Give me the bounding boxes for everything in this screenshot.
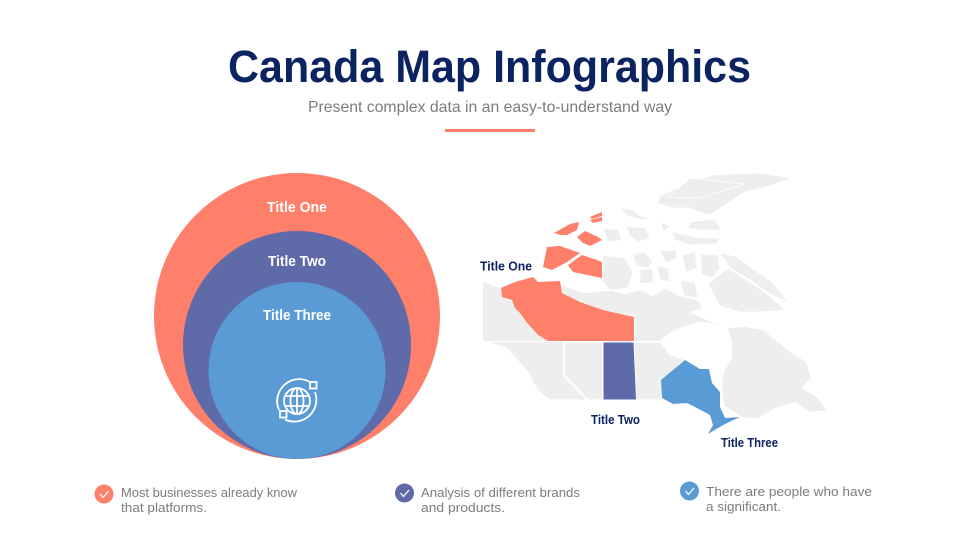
subtitle: Present complex data in an easy-to-understand way — [308, 99, 672, 116]
bullet text: There are people who have — [706, 484, 872, 499]
quebec and atlantic provinces — [722, 327, 826, 418]
region: title one mainland — [501, 277, 634, 341]
bullet text: that platforms. — [121, 500, 207, 515]
bullet: analysis — [395, 484, 581, 515]
alberta — [565, 343, 602, 400]
manitoba — [634, 343, 684, 400]
region: title three — [661, 360, 740, 434]
bullet text: Most businesses already know — [121, 485, 298, 500]
icon: indigo check — [395, 484, 414, 502]
icon: globe with arrows — [277, 379, 316, 422]
circle: title three — [208, 282, 386, 459]
bullet text: Analysis of different brands — [421, 485, 581, 500]
label: title one: Title One — [267, 200, 327, 216]
arctic islands — [603, 173, 792, 312]
nested circle chart — [154, 173, 440, 459]
circle: title one — [154, 173, 440, 459]
label: title two: Title Two — [591, 413, 640, 427]
label: title three: Title Three — [721, 436, 778, 450]
bullet text: and products. — [421, 500, 505, 515]
label: title three: Title Three — [263, 308, 331, 324]
label: title two: Title Two — [268, 254, 326, 270]
northwest mainland and nunavut — [562, 285, 725, 341]
region: title one northern islands — [543, 212, 602, 278]
circle: title two — [183, 231, 411, 459]
region: title two — [604, 342, 636, 400]
yukon — [483, 282, 548, 341]
bullet: people — [680, 482, 872, 514]
icon: orange check — [94, 484, 114, 504]
icon: blue check — [680, 482, 699, 500]
bullet text: a significant. — [706, 499, 781, 514]
label: title one: Title One — [480, 260, 532, 274]
title: Canada Map Infographics — [228, 41, 751, 92]
british columbia — [490, 342, 586, 400]
title underline — [445, 129, 535, 132]
bullet: most businesses — [94, 484, 298, 515]
map of Canada — [480, 173, 826, 450]
